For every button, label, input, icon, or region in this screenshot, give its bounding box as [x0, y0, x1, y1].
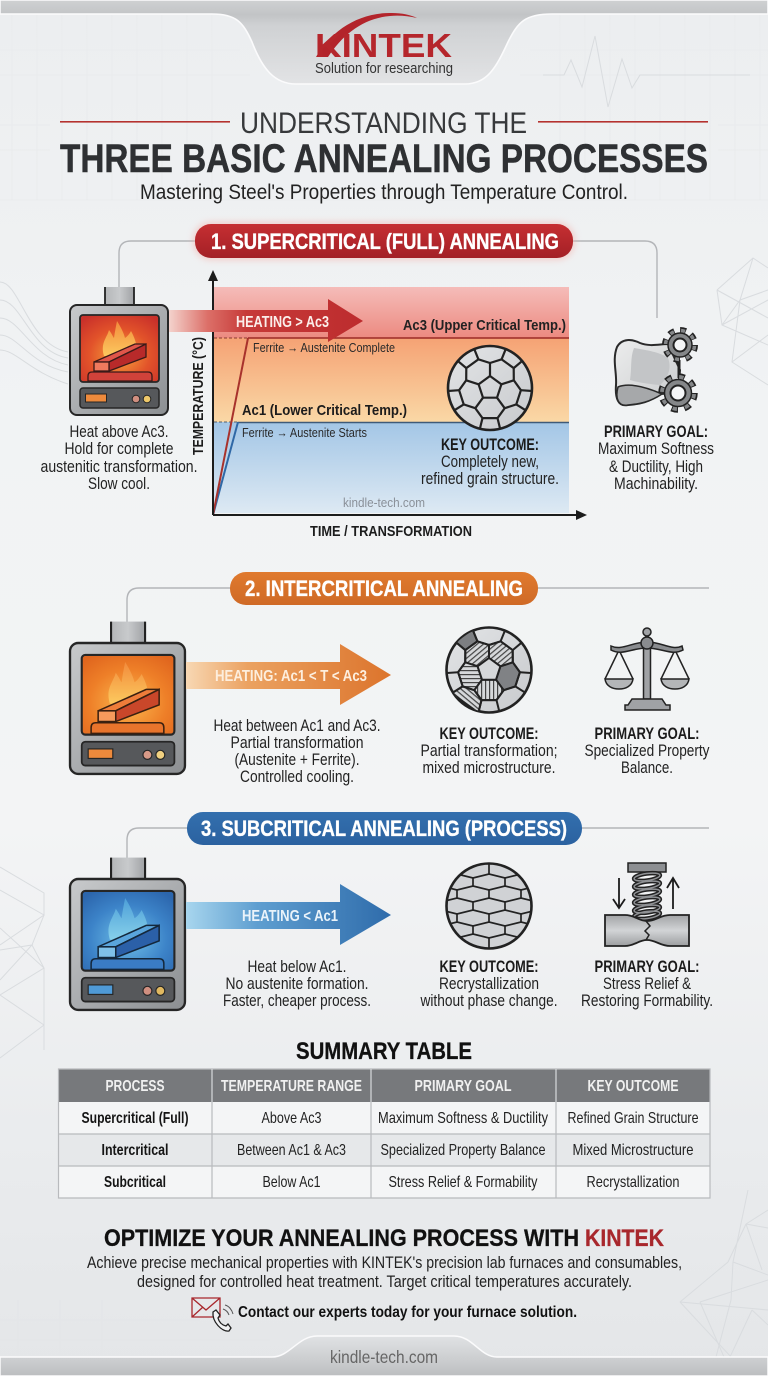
furnace: blue: [70, 858, 185, 1010]
primary goal text 1: Maximum Softness: [598, 440, 714, 458]
cta body: [87, 1254, 682, 1291]
table header row: PRIMARY GOAL: [414, 1078, 512, 1095]
cta body: Achieve precise mechanical properties with KINTEK's precision lab furnaces and consumables,: [87, 1254, 682, 1272]
description: intercritical: Controlled cooling.: [240, 768, 354, 786]
primary goal text 3: Restoring Formability.: [581, 992, 713, 1010]
key outcome text: KEY OUTCOME:: [441, 436, 539, 454]
key outcome text 2: [420, 725, 558, 777]
label: ferrite starts: Ferrite → Austenite Starts: [242, 426, 367, 440]
table header row: [106, 1078, 679, 1095]
table row: intercritical: Intercritical: [102, 1142, 168, 1159]
primary goal text 1: & Ductility, High: [609, 458, 703, 476]
table row: supercritical: Refined Grain Structure: [568, 1110, 699, 1127]
description: intercritical: [214, 717, 380, 786]
key outcome text 3: [420, 958, 558, 1010]
table row: supercritical: [82, 1110, 699, 1127]
description: supercritical: [40, 423, 198, 493]
section pill 3: [187, 812, 582, 845]
table header row: KEY OUTCOME: [588, 1078, 679, 1095]
table row: subcritical: Recrystallization: [586, 1174, 680, 1191]
label: Ac1: Ac1 (Lower Critical Temp.): [242, 402, 407, 419]
icon: metal with gears: [615, 330, 694, 409]
arrow: heating above Ac3: HEATING > Ac3: [236, 314, 329, 331]
description: intercritical: Heat between Ac1 and Ac3.: [214, 717, 380, 735]
section pill 3: 3. SUBCRITICAL ANNEALING (PROCESS): [201, 816, 567, 841]
primary goal text 3: [581, 958, 713, 1010]
chart: temperature vs time: [191, 270, 587, 540]
gear bottom: [662, 377, 694, 409]
label: ferrite complete: Ferrite → Austenite Complete: [253, 341, 395, 355]
arrow: heating below Ac1: HEATING < Ac1: [242, 908, 338, 925]
primary goal text 1: [598, 423, 714, 493]
primary goal text 3: PRIMARY GOAL:: [594, 958, 700, 976]
panel: supercritical annealing: [40, 222, 714, 540]
table row: intercritical: [102, 1142, 694, 1159]
primary goal text 2: PRIMARY GOAL:: [594, 725, 700, 743]
description: supercritical: Slow cool.: [88, 475, 150, 493]
description: subcritical: No austenite formation.: [226, 975, 368, 993]
icon: spring and stressed bar: [605, 863, 689, 946]
table row: intercritical: Between Ac1 & Ac3: [237, 1142, 346, 1159]
furnace: orange: [70, 622, 185, 774]
key outcome text: refined grain structure.: [421, 470, 559, 488]
description: subcritical: [223, 958, 371, 1010]
logo: KINTEK: [315, 13, 453, 77]
logo wordmark: KINTEK: [315, 27, 452, 64]
panel: intercritical annealing: [70, 572, 710, 786]
description: subcritical: Heat below Ac1.: [248, 958, 346, 976]
furnace: red: [70, 287, 168, 415]
table row: subcritical: Stress Relief & Formability: [388, 1174, 538, 1191]
icon: envelope and phone: [192, 1298, 233, 1331]
table row: intercritical: Specialized Property Balance: [380, 1142, 546, 1159]
table row: subcritical: [104, 1174, 680, 1191]
cta heading: KINTEK: [585, 1225, 664, 1252]
chart watermark: kindle-tech.com: [343, 495, 425, 510]
primary goal text 2: Balance.: [621, 759, 673, 777]
panel: subcritical annealing: [70, 812, 713, 1010]
key outcome text 3: without phase change.: [420, 992, 558, 1010]
arrow: heating between Ac1 and Ac3: HEATING: Ac1 < T < Ac3: [215, 668, 367, 685]
section pill 2: 2. INTERCRITICAL ANNEALING: [245, 576, 523, 601]
table row: supercritical: Maximum Softness & Ductility: [378, 1110, 548, 1127]
description: intercritical: (Austenite + Ferrite).: [234, 751, 360, 769]
table row: intercritical: Mixed Microstructure: [572, 1142, 694, 1159]
key outcome text: Completely new,: [441, 453, 539, 471]
key outcome text: [421, 436, 559, 488]
logo swoosh: [316, 13, 417, 57]
description: supercritical: austenitic transformation.: [40, 458, 198, 476]
icon: mixed microstructure: [445, 628, 533, 713]
arrow: heating below Ac1: [186, 884, 391, 945]
section pill 2: [230, 572, 538, 605]
icon: balance scales: [605, 628, 689, 710]
footer url: kindle-tech.com: [330, 1347, 438, 1367]
footer band: [0, 1336, 768, 1376]
primary goal text 1: PRIMARY GOAL:: [604, 423, 708, 441]
label: Ac3: Ac3 (Upper Critical Temp.): [403, 318, 566, 334]
call to action: [87, 1225, 682, 1331]
key outcome text 3: KEY OUTCOME:: [440, 958, 538, 976]
title block: [60, 107, 708, 204]
y axis label: TEMPERATURE (°C): [191, 337, 207, 455]
key outcome text 2: KEY OUTCOME:: [440, 725, 538, 743]
key outcome text 2: Partial transformation;: [420, 742, 558, 760]
cta heading: OPTIMIZE YOUR ANNEALING PROCESS WITH: [104, 1225, 579, 1252]
primary goal text 2: [584, 725, 710, 777]
subtitle: Mastering Steel's Properties through Temperature Control.: [140, 181, 628, 204]
gear top: [666, 330, 694, 360]
summary table: [58, 1069, 710, 1198]
arrow: heating above Ac3: [169, 299, 363, 342]
cta contact line: Contact our experts today for your furnace solution.: [238, 1304, 577, 1321]
table row: subcritical: Subcritical: [104, 1174, 166, 1191]
title line 1: UNDERSTANDING THE: [240, 107, 527, 140]
icon: refined grain structure: [446, 346, 534, 431]
icon: recrystallized grains: [441, 862, 537, 950]
description: supercritical: Hold for complete: [64, 440, 174, 458]
summary table heading: SUMMARY TABLE: [296, 1038, 472, 1065]
primary goal text 2: Specialized Property: [584, 742, 710, 760]
key outcome text 2: mixed microstructure.: [422, 759, 556, 777]
table row: supercritical: Supercritical (Full): [82, 1110, 188, 1127]
primary goal text 3: Stress Relief &: [603, 975, 691, 993]
description: subcritical: Faster, cheaper process.: [223, 992, 371, 1010]
description: intercritical: Partial transformation: [230, 734, 364, 752]
primary goal text 1: Machinability.: [614, 475, 698, 493]
description: supercritical: Heat above Ac3.: [70, 423, 168, 441]
section pill 1: [195, 224, 573, 258]
table header row: PROCESS: [106, 1078, 165, 1095]
table row: subcritical: Below Ac1: [262, 1174, 321, 1191]
arrow: heating between Ac1 and Ac3: [186, 644, 391, 705]
cta body: designed for controlled heat treatment. Target critical temperatures accurately.: [137, 1273, 632, 1291]
x axis label: TIME / TRANSFORMATION: [310, 523, 472, 540]
logo tagline: Solution for researching: [315, 61, 453, 77]
header band with logo notch: [0, 0, 768, 84]
table header row: TEMPERATURE RANGE: [221, 1078, 362, 1095]
section pill 1: 1. SUPERCRITICAL (FULL) ANNEALING: [211, 229, 559, 254]
key outcome text 3: Recrystallization: [439, 975, 539, 993]
table row: supercritical: Above Ac3: [262, 1110, 322, 1127]
